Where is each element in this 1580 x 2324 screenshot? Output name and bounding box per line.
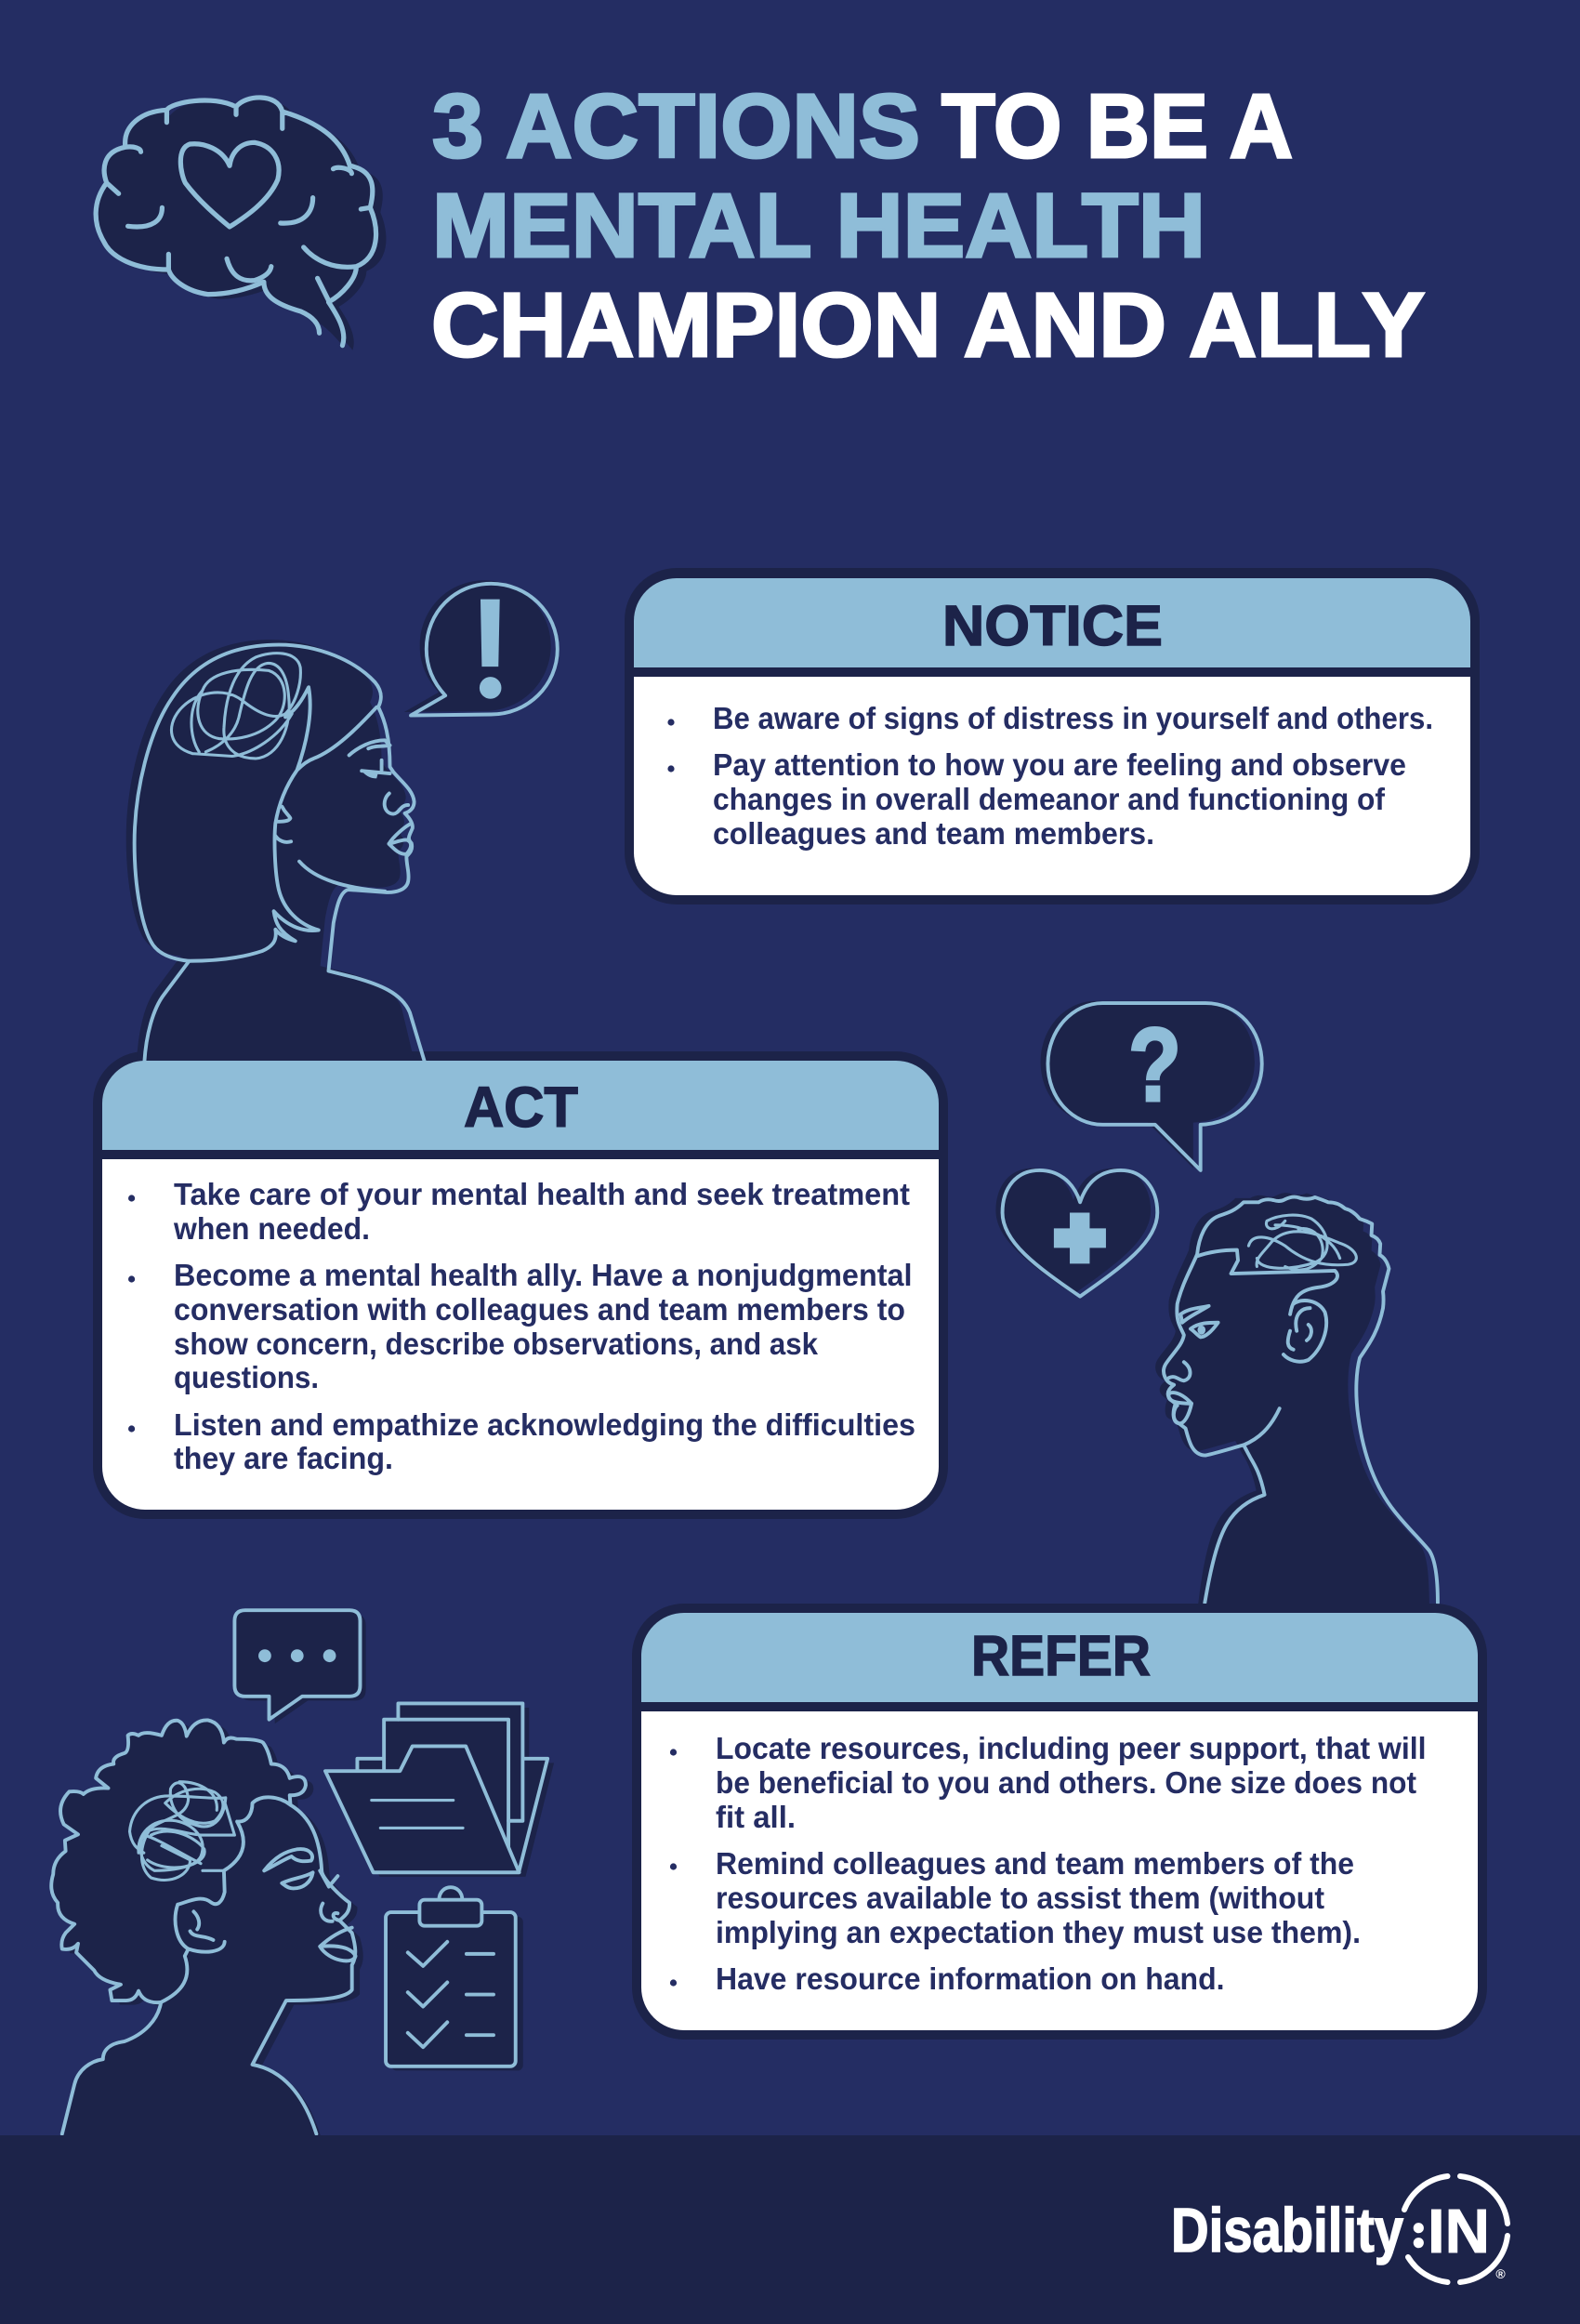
icon: heart with cross [995, 1169, 1157, 1297]
text block: act bullets [128, 1178, 915, 1476]
text block: refer bullets: implying an expectation they must use them). [716, 1916, 1361, 1950]
panel: ACT [102, 1061, 939, 1510]
title [431, 75, 1425, 376]
icon: question speech bubble [1041, 1001, 1262, 1170]
heading: ACT: ACT [464, 1076, 578, 1139]
illustration: person with tangled thoughts and exclamation bubble [126, 580, 558, 1071]
illustration: person with question bubble and heart [995, 1001, 1438, 1619]
heading: NOTICE: NOTICE [942, 594, 1163, 657]
text block: act bullets: Take care of your mental health and seek treatment [174, 1178, 910, 1212]
icon: exclamation speech bubble [404, 580, 558, 716]
text block: refer bullets: resources available to assist them (without [716, 1882, 1324, 1916]
text block: notice bullets [667, 702, 1433, 852]
text block: act bullets: they are facing. [174, 1442, 393, 1476]
logo: Disability:IN [1171, 2176, 1508, 2282]
logo: Disability:IN: Disability [1171, 2196, 1403, 2265]
panel: NOTICE [625, 568, 1480, 905]
title: CHAMPION AND ALLY [431, 274, 1425, 376]
heading: REFER: REFER [971, 1624, 1151, 1687]
title: TO BE A [941, 75, 1293, 177]
footer band [0, 2135, 1580, 2324]
icon: brain with heart [96, 98, 386, 350]
panel: REFER [632, 1604, 1487, 2040]
text block: refer bullets: Remind colleagues and team members of the [716, 1847, 1354, 1882]
text block: act bullets: questions. [174, 1361, 319, 1395]
text block: refer bullets [670, 1732, 1426, 1997]
illustration: person with chat bubble, folder and checklist [51, 1610, 554, 2149]
text block: notice bullets: changes in overall demeanor and functioning of [713, 783, 1386, 817]
text block: act bullets: Listen and empathize acknowledging the difficulties [174, 1408, 915, 1443]
icon: folder with papers [325, 1703, 554, 1877]
panel border: ACT [93, 1051, 948, 1519]
logo: Disability:IN: IN [1428, 2197, 1490, 2266]
logo: Disability:IN: ® [1495, 2266, 1506, 2281]
text block: act bullets: when needed. [173, 1212, 370, 1247]
text block: notice bullets: Pay attention to how you are feeling and observe [713, 748, 1406, 783]
text block: refer bullets: Have resource information on hand. [716, 1962, 1225, 1997]
title: MENTAL HEALTH [432, 175, 1205, 276]
text block: act bullets: conversation with colleagues and team members to [174, 1293, 905, 1327]
text block: refer bullets: Locate resources, including peer support, that will [716, 1732, 1426, 1766]
title: 3 ACTIONS [432, 75, 920, 177]
icon: clipboard checklist [386, 1887, 523, 2070]
text block: refer bullets: fit all. [716, 1801, 796, 1835]
icon: question mark: ? [1128, 1007, 1181, 1123]
icon: chat bubble with dots [234, 1610, 366, 1723]
text block: act bullets: show concern, describe observations, and ask [174, 1327, 818, 1362]
text block: notice bullets: Be aware of signs of distress in yourself and others. [713, 702, 1433, 736]
text block: refer bullets: be beneficial to you and others. One size does not [716, 1766, 1416, 1801]
text block: notice bullets: colleagues and team members. [713, 817, 1154, 852]
text block: act bullets: Become a mental health ally. Have a nonjudgmental [174, 1259, 913, 1293]
